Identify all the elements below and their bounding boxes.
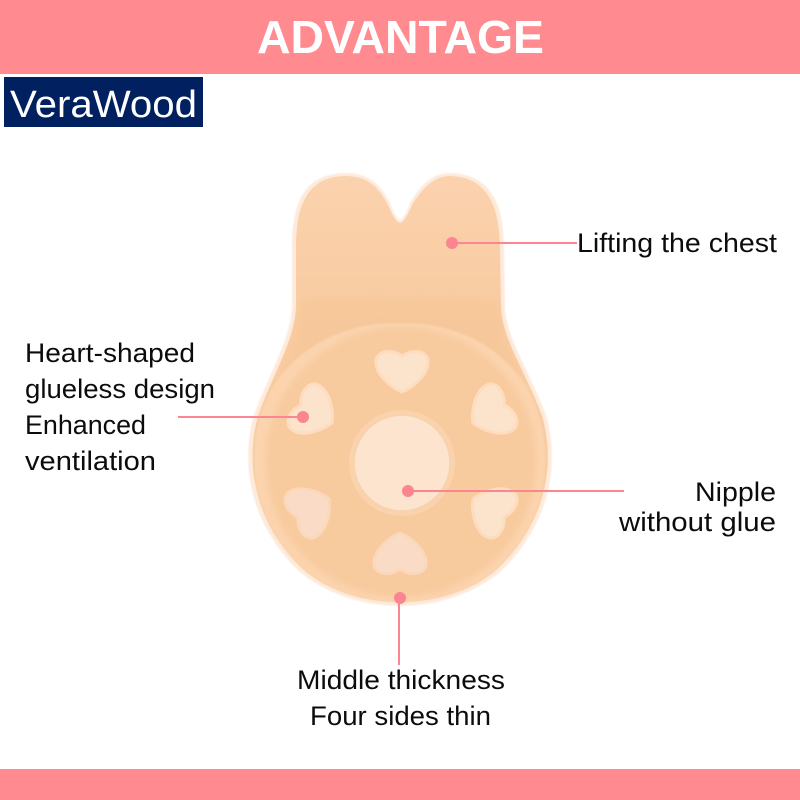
nipple pad (349, 410, 455, 516)
callout: nipple without glue: Nipple (695, 477, 776, 507)
callout: heart-shaped glueless design (25, 338, 309, 476)
patch body (253, 176, 548, 602)
callout: heart-shaped glueless design: Heart-shaped (25, 338, 195, 368)
callout: lifting the chest: Lifting the chest (577, 228, 778, 258)
heart vent: top (376, 352, 428, 392)
brand badge: VeraWood: VeraWood (10, 84, 197, 126)
shaded band above cup (280, 297, 522, 375)
callout: heart-shaped glueless design: glueless design (25, 374, 215, 404)
heart vent: bottom (374, 533, 426, 573)
heart vent: upper left (284, 380, 345, 446)
callout: middle thickness (297, 592, 505, 731)
callout: lifting the chest (446, 228, 778, 258)
callout: heart-shaped glueless design: ventilation (25, 446, 156, 476)
raised cup area (254, 323, 545, 602)
callout: middle thickness: Four sides thin (310, 701, 491, 731)
callout: middle thickness: Middle thickness (297, 665, 505, 695)
callout: nipple without glue (402, 477, 776, 537)
heart vent: lower right (460, 476, 521, 542)
bottom banner (0, 769, 800, 800)
heart vent: lower left (281, 476, 342, 542)
product: heart-shaped lift patch (248, 173, 552, 606)
callout: nipple without glue: without glue (618, 507, 776, 537)
inner cup tone (266, 327, 536, 597)
heart vent: upper right (460, 380, 521, 446)
callout: heart-shaped glueless design: Enhanced (25, 410, 146, 440)
top banner (0, 0, 800, 74)
title: ADVANTAGE (257, 11, 544, 63)
patch outline (248, 173, 552, 606)
